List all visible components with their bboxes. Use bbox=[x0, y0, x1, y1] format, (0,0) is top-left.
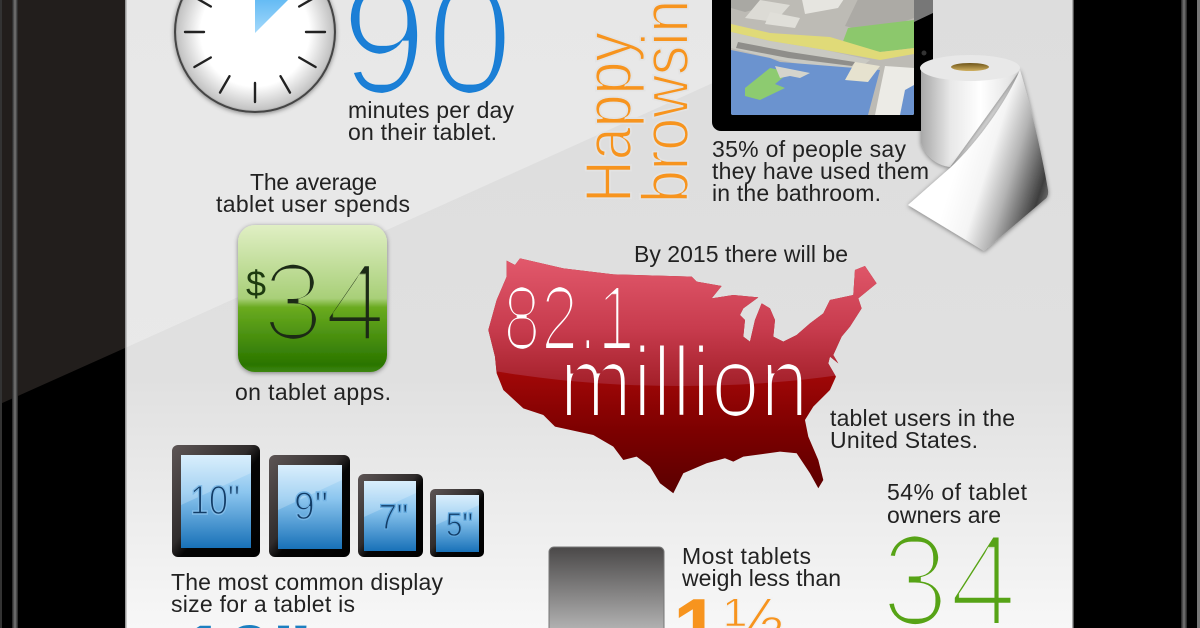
spending lead-in text bbox=[216, 169, 410, 217]
icon: 9 inch tablet bbox=[269, 455, 350, 557]
stat: app spending bbox=[216, 169, 410, 405]
map: united states bbox=[488, 258, 877, 494]
heading: happy browsing bbox=[571, 0, 702, 203]
users caption bbox=[830, 405, 1015, 453]
age caption bbox=[887, 479, 1028, 528]
icon: 9 inch tablet: 9" bbox=[294, 485, 328, 528]
icon: 5 inch tablet bbox=[430, 489, 484, 557]
icon: 7 inch tablet bbox=[358, 474, 423, 557]
map bbox=[731, 0, 914, 115]
weight caption: Most tablets bbox=[682, 543, 811, 569]
word million: million bbox=[559, 327, 809, 437]
stat: tablet weight bbox=[549, 543, 841, 628]
icon: toilet roll bbox=[908, 55, 1048, 251]
icon: tablet with map bbox=[712, 0, 933, 131]
icon: 10 inch tablet: 10" bbox=[190, 477, 240, 523]
icon: grey scale tile bbox=[549, 547, 664, 628]
icon: green app tile: $ bbox=[246, 263, 266, 304]
lead-in text: By 2015 there will be bbox=[634, 241, 848, 267]
bathroom caption: in the bathroom. bbox=[712, 180, 881, 206]
stat: users in 2015 bbox=[488, 245, 1014, 494]
weight value bbox=[673, 582, 784, 628]
spending lead-in text: tablet user spends bbox=[216, 191, 410, 217]
icon: green app tile: 34 bbox=[262, 241, 386, 364]
icon: 5 inch tablet: 5" bbox=[446, 506, 473, 543]
spending lead-in text: The average bbox=[250, 169, 377, 195]
bathroom caption bbox=[712, 136, 929, 206]
roll cylinder bbox=[921, 68, 1020, 167]
roll top bbox=[920, 55, 1020, 81]
icon: green app tile bbox=[238, 225, 387, 372]
age caption: 54% of tablet bbox=[887, 479, 1028, 505]
display caption bbox=[171, 569, 444, 617]
minutes caption: minutes per day bbox=[348, 97, 514, 123]
stat: 90 minutes bbox=[341, 0, 514, 145]
roll core bbox=[951, 63, 989, 71]
display caption: size for a tablet is bbox=[171, 591, 355, 617]
number 82.1: 82.1 bbox=[503, 269, 635, 369]
minutes caption bbox=[348, 97, 514, 145]
icon: 10 inch tablet bbox=[172, 445, 260, 557]
weight caption bbox=[681, 543, 841, 591]
minutes caption: on their tablet. bbox=[348, 119, 497, 145]
icon: clock bbox=[175, 0, 335, 112]
age caption: owners are bbox=[887, 502, 1001, 528]
icon: 7 inch tablet: 7" bbox=[379, 498, 408, 537]
users caption: tablet users in the bbox=[830, 405, 1015, 431]
heading: happy browsing: Happy bbox=[571, 32, 645, 203]
weight caption: weigh less than bbox=[681, 565, 841, 591]
clock wedge bbox=[255, 0, 298, 33]
bathroom caption: 35% of people say bbox=[712, 136, 906, 162]
users caption: United States. bbox=[830, 427, 978, 453]
display caption: The most common display bbox=[171, 569, 444, 595]
screen background bbox=[125, 0, 1074, 628]
bathroom caption: they have used them bbox=[712, 158, 929, 184]
stat: display sizes bbox=[171, 445, 484, 628]
apps caption: on tablet apps. bbox=[235, 379, 391, 405]
stat: owner age bbox=[881, 479, 1028, 628]
loose sheet bbox=[908, 70, 1048, 251]
